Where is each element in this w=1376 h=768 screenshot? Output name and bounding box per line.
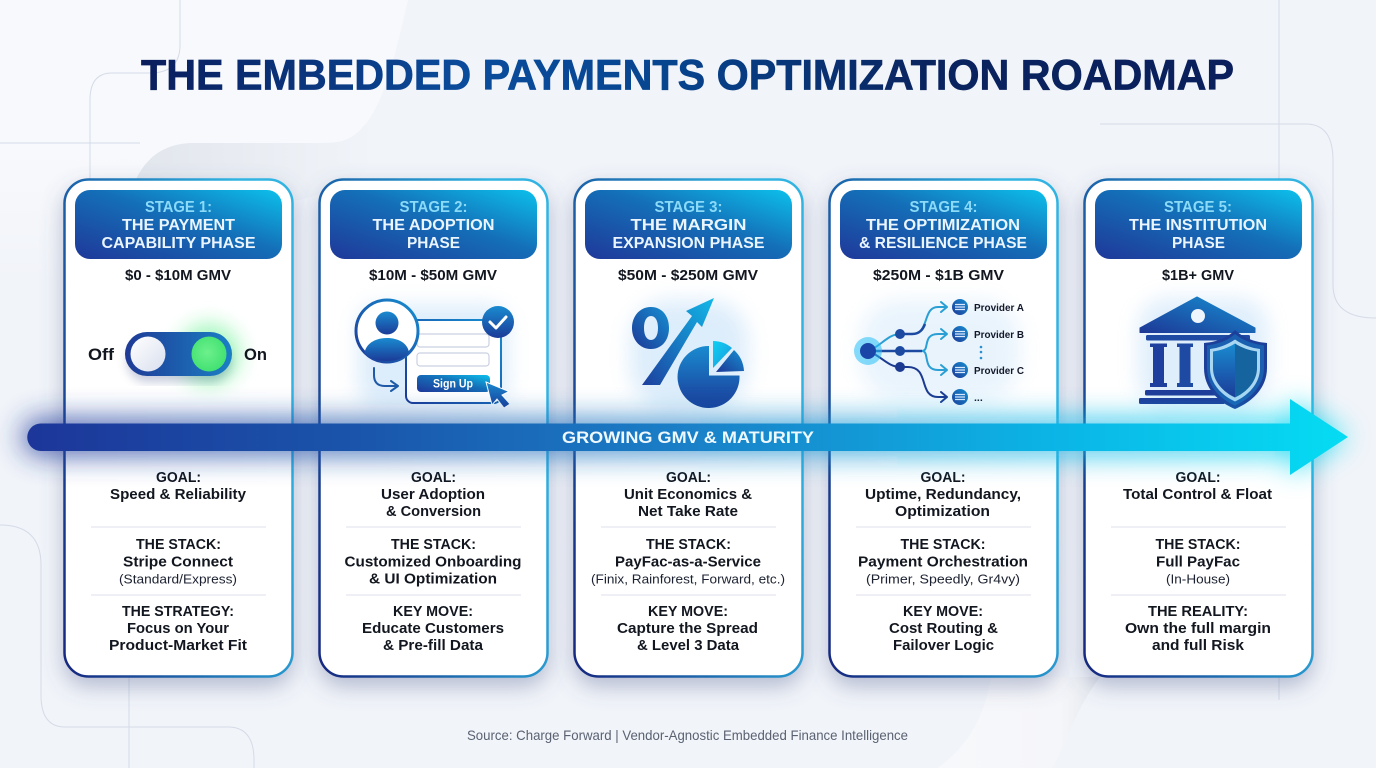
card outline xyxy=(1084,180,1312,676)
goal block: GOAL: xyxy=(666,470,711,486)
key move block: & Pre-fill Data xyxy=(383,638,484,654)
reality block xyxy=(1125,604,1271,654)
goal block: GOAL: xyxy=(920,470,966,486)
goal block xyxy=(381,470,485,520)
stack block: THE STACK: xyxy=(900,537,986,553)
GMV range: $0 - $10M GMV xyxy=(125,268,231,284)
stage header: STAGE 5: xyxy=(1164,199,1232,216)
stage header: THE INSTITUTION xyxy=(1129,217,1267,234)
stage header: PHASE xyxy=(1172,235,1225,252)
icon: on/off toggle: Off xyxy=(88,346,115,364)
stage header xyxy=(330,190,537,259)
goal block xyxy=(1123,470,1272,503)
stack block: THE STACK: xyxy=(136,537,221,553)
strategy block xyxy=(109,604,247,654)
stack block: PayFac-as-a-Service xyxy=(615,554,761,570)
icon: payment routing to providers xyxy=(854,299,1024,405)
panel: stage 5 xyxy=(1084,180,1312,676)
goal block: GOAL: xyxy=(156,470,201,486)
panel: stage 2 xyxy=(320,180,548,676)
key move block: Cost Routing & xyxy=(889,621,999,637)
icon: user sign-up form xyxy=(356,300,514,408)
icon: on/off toggle xyxy=(88,323,267,385)
card outline xyxy=(64,180,292,676)
additional providers: ... xyxy=(974,392,983,404)
stage header: EXPANSION PHASE xyxy=(612,235,765,252)
key move block: Educate Customers xyxy=(362,621,504,637)
stage header: STAGE 4: xyxy=(910,199,978,216)
stack block: THE STACK: xyxy=(1156,537,1240,553)
stack block: Full PayFac xyxy=(1156,554,1240,570)
key move block: Capture the Spread xyxy=(617,621,758,637)
panel: stage 3 xyxy=(574,180,802,676)
goal block: & Conversion xyxy=(386,504,481,520)
stage header: STAGE 1: xyxy=(145,199,212,216)
stack block: Payment Orchestration xyxy=(858,554,1028,570)
source line: Source: Charge Forward | Vendor-Agnostic Embedded Finance Intelligence xyxy=(467,727,908,743)
card outline xyxy=(830,180,1058,676)
stage header xyxy=(585,190,792,259)
arrow: growing GMV and maturity: GROWING GMV & MATURITY xyxy=(562,428,815,447)
goal block xyxy=(865,470,1021,520)
goal block: GOAL: xyxy=(411,470,456,486)
additional providers xyxy=(952,389,983,405)
provider C: Provider C xyxy=(974,365,1024,377)
GMV range: $1B+ GMV xyxy=(1162,268,1234,284)
key move block: & Level 3 Data xyxy=(637,638,740,654)
key move block: KEY MOVE: xyxy=(648,604,728,620)
key move block: Failover Logic xyxy=(893,638,994,654)
stack block xyxy=(591,537,785,586)
goal block: User Adoption xyxy=(381,487,485,503)
goal block: Optimization xyxy=(895,504,990,520)
goal block: GOAL: xyxy=(1176,470,1220,486)
stage header: PHASE xyxy=(407,235,460,252)
icon: user sign-up form: Sign Up xyxy=(433,378,473,390)
stage header: STAGE 3: xyxy=(654,199,722,216)
panel: stage 4 xyxy=(830,180,1058,676)
stage header: THE PAYMENT xyxy=(122,217,235,234)
stack block: Stripe Connect xyxy=(123,554,233,570)
icon: on/off toggle: On xyxy=(244,346,267,364)
stack block: & UI Optimization xyxy=(369,572,497,588)
stage header: THE MARGIN xyxy=(630,217,746,234)
key move block xyxy=(362,604,504,654)
strategy block: Product-Market Fit xyxy=(109,638,247,654)
strategy block: Focus on Your xyxy=(127,621,229,637)
provider A xyxy=(952,299,1024,315)
stage header xyxy=(840,190,1047,259)
arrow: growing GMV and maturity xyxy=(22,399,1348,475)
stage header: CAPABILITY PHASE xyxy=(102,235,256,252)
goal block: Unit Economics & xyxy=(624,487,753,503)
stack block xyxy=(1156,537,1240,586)
goal block xyxy=(624,470,753,520)
panel: stage 1 xyxy=(64,180,292,676)
GMV range: $250M - $1B GMV xyxy=(873,268,1004,284)
key move block xyxy=(889,604,999,654)
title: THE EMBEDDED PAYMENTS OPTIMIZATION ROADMAP xyxy=(141,52,1234,100)
goal block: Speed & Reliability xyxy=(110,487,246,503)
stack block xyxy=(344,537,522,588)
stage header: STAGE 2: xyxy=(400,199,468,216)
reality block: Own the full margin xyxy=(1125,621,1271,637)
continuation dots xyxy=(980,346,982,359)
stack block: THE STACK: xyxy=(391,537,476,553)
stage header: & RESILIENCE PHASE xyxy=(859,235,1027,252)
card outline xyxy=(574,180,802,676)
stack block: Customized Onboarding xyxy=(344,554,522,570)
goal block: Total Control & Float xyxy=(1123,487,1272,503)
GMV range: $10M - $50M GMV xyxy=(369,268,497,284)
provider B: Provider B xyxy=(974,329,1024,341)
stack block: (In-House) xyxy=(1166,572,1230,586)
stage header: THE OPTIMIZATION xyxy=(866,217,1020,234)
reality block: THE REALITY: xyxy=(1148,604,1248,620)
stack block xyxy=(119,537,237,586)
provider B xyxy=(952,326,1024,342)
goal block xyxy=(110,470,246,503)
stack block: (Primer, Speedly, Gr4vy) xyxy=(866,572,1020,586)
stack block: THE STACK: xyxy=(646,537,731,553)
stage header xyxy=(75,190,282,259)
key move block xyxy=(617,604,758,654)
stage header xyxy=(1095,190,1302,259)
icon: percent arrow and pie chart xyxy=(630,298,748,408)
reality block: and full Risk xyxy=(1152,638,1245,654)
stage header: THE ADOPTION xyxy=(372,217,494,234)
provider A: Provider A xyxy=(974,302,1024,314)
key move block: KEY MOVE: xyxy=(903,604,983,620)
key move block: KEY MOVE: xyxy=(393,604,473,620)
goal block: Net Take Rate xyxy=(638,504,738,520)
GMV range: $50M - $250M GMV xyxy=(618,268,758,284)
stack block xyxy=(858,537,1028,586)
stack block: (Finix, Rainforest, Forward, etc.) xyxy=(591,572,785,586)
stack block: (Standard/Express) xyxy=(119,572,237,586)
card outline xyxy=(320,180,548,676)
icon: bank with shield xyxy=(1138,297,1268,409)
strategy block: THE STRATEGY: xyxy=(122,604,234,620)
provider C xyxy=(952,362,1024,378)
goal block: Uptime, Redundancy, xyxy=(865,487,1021,503)
